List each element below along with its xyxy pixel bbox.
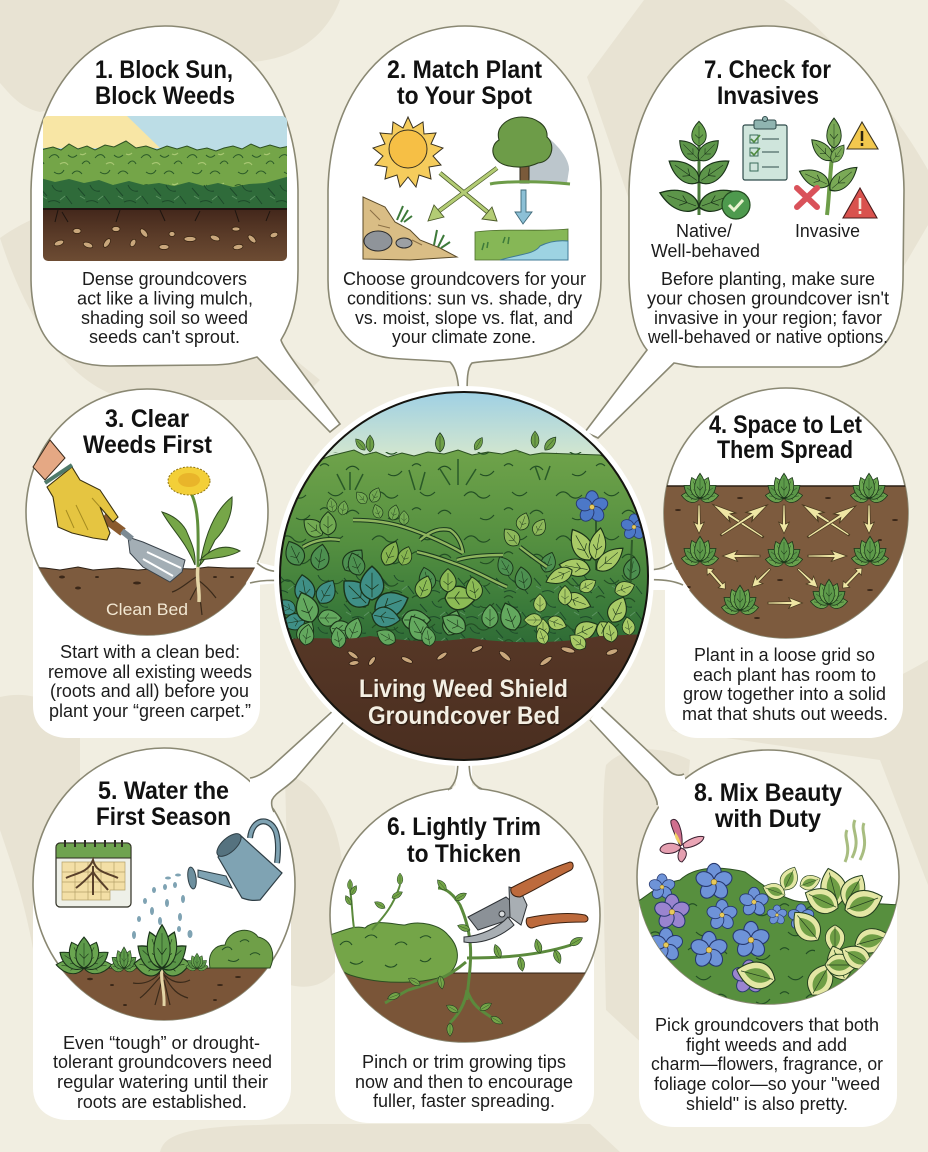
body text 1: shading soil so weed xyxy=(81,308,248,328)
body text 4: grow together into a solid xyxy=(683,684,886,704)
body text 6 xyxy=(355,1052,573,1111)
body text 5: Even “tough” or drought- xyxy=(63,1033,260,1053)
heading 2: 2. Match Plant xyxy=(387,56,543,84)
heading 3 xyxy=(83,405,213,459)
heading 3: 3. Clear xyxy=(105,405,189,433)
heading 4: Them Spread xyxy=(717,436,853,464)
body text 3: Start with a clean bed: xyxy=(60,642,240,662)
connector to centre xyxy=(590,706,690,812)
connector to centre xyxy=(448,755,484,792)
heading 8: 8. Mix Beauty xyxy=(694,779,842,807)
body text 7: your chosen groundcover isn't xyxy=(647,288,889,308)
icon: fragrance wisps xyxy=(845,820,865,862)
body text 8: charm—flowers, fragrance, or xyxy=(651,1054,883,1074)
body text 3 xyxy=(48,642,252,721)
plants row xyxy=(55,925,273,978)
icon: native plant xyxy=(657,121,750,219)
connector to centre xyxy=(640,563,690,590)
body text 1: Dense groundcovers xyxy=(82,269,247,289)
icon: watering can xyxy=(187,821,282,900)
body text 4: each plant has room to xyxy=(693,665,876,685)
heading 8 xyxy=(694,779,842,833)
body text 7: well-behaved or native options. xyxy=(647,327,888,347)
body text 4: Plant in a loose grid so xyxy=(694,645,875,665)
arrows crossing xyxy=(428,168,532,224)
icon: pruners xyxy=(464,862,588,943)
heading 3: Weeds First xyxy=(83,431,213,459)
illustration: foliage shading soil xyxy=(40,116,290,261)
panel 8: mix beauty xyxy=(590,706,910,1127)
body text 1: seeds can't sprout. xyxy=(89,327,240,347)
connector to centre xyxy=(250,706,347,812)
body text 4: mat that shuts out weeds. xyxy=(682,704,888,724)
heading 2: to Your Spot xyxy=(397,82,533,110)
icon: shade tree xyxy=(490,117,570,184)
labels native and invasive: Well-behaved xyxy=(651,241,760,261)
icon: gloved hand with hand fork xyxy=(33,440,185,582)
icon: calendar with roots xyxy=(56,840,131,907)
label: centre title: Groundcover Bed xyxy=(369,704,561,732)
label: centre title: Groundcover Bed xyxy=(368,702,560,730)
central circle: living weed shield xyxy=(270,386,660,766)
heading 1 xyxy=(95,56,235,110)
heading 7: Invasives xyxy=(717,82,819,110)
icon: check badge xyxy=(722,191,750,219)
illustration: soil bed xyxy=(38,566,255,635)
body text 2: vs. moist, slope vs. flat, and xyxy=(355,308,573,328)
body text 7 xyxy=(647,269,889,347)
heading 1: Block Weeds xyxy=(95,82,235,110)
illustration: groundcover bed xyxy=(270,392,660,760)
body text 6: now and then to encourage xyxy=(355,1072,573,1092)
illustration: soil grid xyxy=(660,486,912,646)
body text 3: remove all existing weeds xyxy=(48,662,252,682)
icon: dandelion weed with roots xyxy=(162,467,240,615)
plants grid xyxy=(681,473,889,616)
labels native and invasive xyxy=(651,221,860,261)
illustration: flower and foliage mix xyxy=(639,862,896,1004)
icon: warning triangles and red x xyxy=(797,122,878,218)
body text 7: Before planting, make sure xyxy=(661,269,875,289)
body text 2: your climate zone. xyxy=(392,327,536,347)
water drops xyxy=(132,874,192,939)
body text 7: invasive in your region; favor xyxy=(654,308,882,328)
panel 5: water first season xyxy=(30,706,347,1120)
icon: clipboard xyxy=(743,116,787,180)
icon: sun xyxy=(373,117,443,187)
body text 8: Pick groundcovers that both xyxy=(655,1015,879,1035)
body text 2: conditions: sun vs. shade, dry xyxy=(347,288,582,308)
heading 2 xyxy=(387,56,543,110)
body text 3: (roots and all) before you xyxy=(50,681,249,701)
heading 4 xyxy=(709,411,863,464)
body text 1 xyxy=(77,269,253,347)
heading 4: 4. Space to Let xyxy=(709,411,863,439)
label: centre title: Living Weed Shield xyxy=(359,675,568,703)
icon: blue flower stems xyxy=(596,520,632,590)
body text 5: tolerant groundcovers need xyxy=(53,1052,272,1072)
body text 8: foliage color—so your "weed xyxy=(654,1074,880,1094)
panel 2: match plant xyxy=(328,26,601,400)
icon: moist ground with water xyxy=(475,229,568,260)
body text 3: plant your “green carpet.” xyxy=(49,701,251,721)
icon: invasive plant xyxy=(796,118,862,215)
body text 8 xyxy=(651,1015,883,1114)
heading 1: 1. Block Sun, xyxy=(95,56,233,84)
body text 5 xyxy=(53,1033,272,1112)
illustration: soil with roots xyxy=(64,968,266,1020)
heading 5 xyxy=(96,777,231,831)
body text 1: act like a living mulch, xyxy=(77,288,253,308)
labels native and invasive: Invasive xyxy=(795,221,860,241)
body text 6: fuller, faster spreading. xyxy=(373,1091,555,1111)
heading 6: to Thicken xyxy=(407,840,521,868)
body text 5: regular watering until their xyxy=(57,1072,268,1092)
body text 6: Pinch or trim growing tips xyxy=(362,1052,566,1072)
heading 8: with Duty xyxy=(714,805,821,833)
label: centre title xyxy=(360,679,568,726)
icon: butterfly xyxy=(660,819,704,862)
panel 1: block sun xyxy=(31,26,340,432)
heading 7 xyxy=(704,56,831,110)
heading 6 xyxy=(387,813,541,868)
icon: dry slope with rocks xyxy=(363,197,457,260)
spreading arrows xyxy=(694,500,874,608)
heading 5: First Season xyxy=(96,803,231,831)
illustration: bushy groundcover with stems xyxy=(330,873,584,1036)
illustration: soil xyxy=(344,972,586,1042)
label clean bed: Clean Bed xyxy=(106,600,188,619)
body text 8: fight weeds and add xyxy=(686,1035,847,1055)
icon: blue flowers xyxy=(575,491,648,541)
body text 2 xyxy=(343,269,586,347)
body text 2: Choose groundcovers for your xyxy=(343,269,586,289)
panel 3: clear weeds xyxy=(20,389,290,738)
label: centre title: Living Weed Shield xyxy=(360,676,569,704)
panel 4: space to spread xyxy=(640,388,912,738)
body text 5: roots are established. xyxy=(77,1092,247,1112)
panel 7: check invasives xyxy=(585,26,904,438)
heading 7: 7. Check for xyxy=(704,56,831,84)
panel 6: trim to thicken xyxy=(328,755,603,1123)
body text 4 xyxy=(682,645,888,724)
connector to centre xyxy=(246,560,290,586)
heading 6: 6. Lightly Trim xyxy=(387,813,541,841)
labels native and invasive: Native/ xyxy=(676,221,732,241)
body text 8: shield" is also pretty. xyxy=(686,1094,848,1114)
heading 5: 5. Water the xyxy=(98,777,229,805)
